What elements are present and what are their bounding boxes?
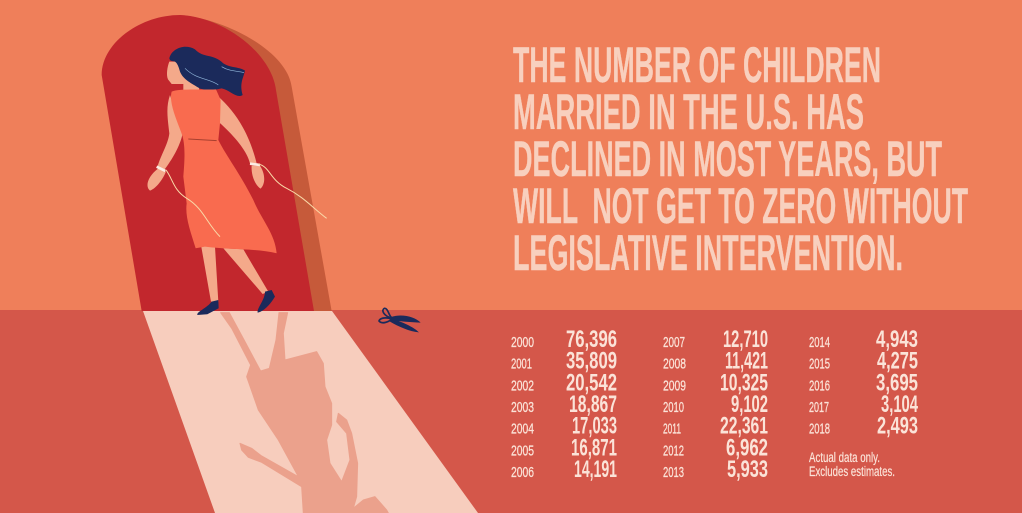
footnote: Excludes estimates. — [809, 464, 895, 479]
data table: 2007-2013: 22,361 — [720, 413, 768, 440]
arched doorway — [102, 15, 314, 311]
floor — [0, 310, 1022, 513]
hair — [169, 47, 245, 96]
data table: 2014-2018: 2016 — [809, 378, 830, 394]
woman figure — [147, 47, 327, 315]
data table: 2007-2013: 2008 — [663, 357, 686, 373]
shoes — [197, 290, 275, 315]
light beam on floor — [143, 311, 478, 513]
dress — [171, 89, 277, 253]
data table: 2014-2018: 4,943 — [876, 326, 918, 353]
bracelets — [157, 164, 260, 171]
data table: 2000-2006: 2001 — [511, 357, 532, 373]
data table: 2000-2006: 35,809 — [566, 348, 617, 375]
data table: 2000-2006: 2004 — [511, 422, 534, 438]
data table: 2000-2006: 17,033 — [572, 413, 617, 440]
data table: 2014-2018: 2014 — [809, 335, 830, 351]
data table: 2007-2013: 5,933 — [727, 456, 768, 483]
data table: 2007-2013: 2013 — [663, 465, 684, 481]
data table: 2007-2013: 2010 — [663, 400, 684, 416]
data table: 2007-2013 — [663, 326, 768, 483]
woman's shadow — [221, 313, 388, 513]
data table: 2007-2013: 2007 — [663, 335, 685, 351]
data table: 2000-2006: 2005 — [511, 443, 534, 459]
data table: 2000-2006: 76,396 — [566, 326, 617, 353]
data table: 2000-2006: 2000 — [511, 335, 534, 351]
background wall — [0, 0, 1022, 311]
data table: 2014-2018: 2,493 — [877, 413, 918, 440]
data table: 2014-2018: 3,695 — [876, 369, 918, 396]
hair highlights — [185, 67, 244, 85]
data table: 2014-2018: 3,104 — [881, 391, 918, 418]
data table: 2007-2013: 2009 — [663, 378, 686, 394]
belt — [188, 139, 217, 141]
data table: 2007-2013: 6,962 — [726, 434, 768, 461]
data table: 2007-2013: 12,710 — [723, 326, 768, 353]
title — [513, 37, 968, 281]
data table: 2000-2006: 14,191 — [574, 456, 617, 483]
data table: 2007-2013: 9,102 — [731, 391, 768, 418]
data table: 2000-2006: 16,871 — [571, 434, 617, 461]
data table: 2000-2006 — [511, 326, 617, 483]
data table: 2014-2018: 2018 — [809, 422, 830, 438]
data table: 2007-2013: 2011 — [663, 422, 681, 438]
data table: 2000-2006: 20,542 — [566, 369, 617, 396]
data table: 2007-2013: 11,421 — [725, 348, 768, 375]
data table: 2014-2018 — [809, 326, 918, 440]
face and neck — [167, 62, 199, 91]
data table: 2000-2006: 18,867 — [569, 391, 617, 418]
icon: scissors — [379, 308, 421, 332]
data table: 2014-2018: 2015 — [809, 357, 830, 373]
data table: 2007-2013: 10,325 — [720, 369, 768, 396]
data table: 2000-2006: 2002 — [511, 378, 534, 394]
legs — [201, 245, 268, 302]
data table: 2000-2006: 2006 — [511, 465, 534, 481]
data table: 2014-2018: 2017 — [809, 400, 829, 416]
doorway side wall — [180, 15, 332, 311]
arms and hands — [147, 95, 264, 191]
data table: 2000-2006: 2003 — [511, 400, 534, 416]
footnote: Actual data only. — [809, 450, 880, 465]
data table: 2007-2013: 2012 — [663, 443, 684, 459]
cut strings — [166, 164, 327, 237]
footnote — [809, 450, 895, 479]
data table: 2014-2018: 4,275 — [877, 348, 918, 375]
